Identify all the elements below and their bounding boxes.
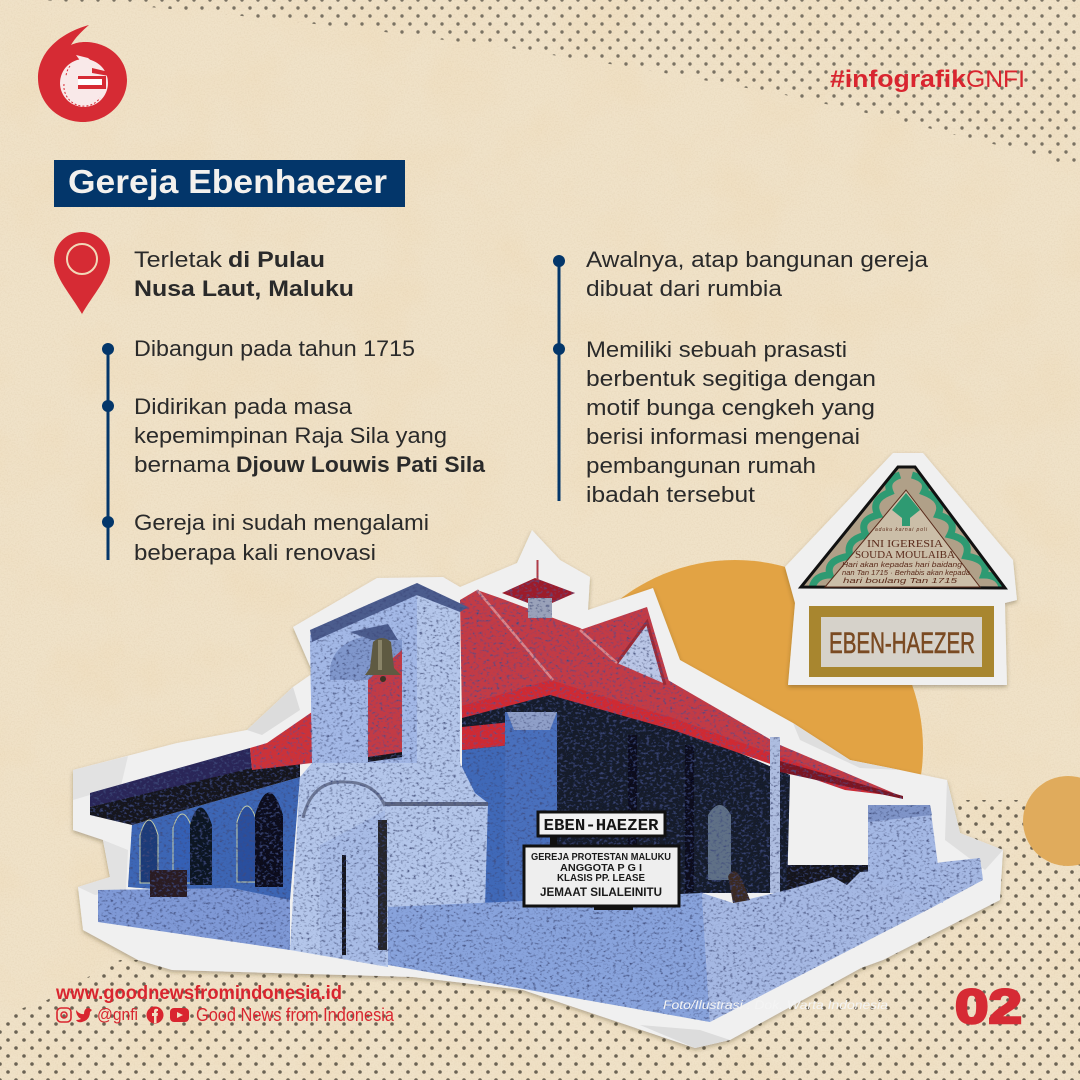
text: left column facts: Gereja ini sudah mengalami xyxy=(134,510,429,535)
text: left column facts: beberapa kali renovasi xyxy=(134,540,376,565)
hashtag: #infografik xyxy=(830,66,967,93)
triangular plaque: aduku karnai poli xyxy=(875,527,928,533)
triangular plaque: INI IGERESIA xyxy=(867,538,943,550)
icon: youtube xyxy=(170,1008,189,1022)
footer: website and socials: www.goodnewsfromindonesia.id xyxy=(55,983,342,1004)
text: left column facts: kepemimpinan Raja Sila yang xyxy=(134,423,447,448)
text: right column facts xyxy=(586,247,929,507)
photo credit: Foto/Ilustrasi : Dok. Warta Indonesia xyxy=(663,998,888,1012)
photo: church cut-out xyxy=(73,530,1003,1048)
page number: 02 xyxy=(955,981,1022,1034)
hashtag: GNFI xyxy=(966,66,1025,93)
triangular plaque xyxy=(801,467,1005,588)
icon: facebook xyxy=(146,1006,164,1024)
triangular plaque: hari boulang Tan 1715 xyxy=(843,578,957,585)
text: right column facts: pembangunan rumah xyxy=(586,453,816,478)
text: right column facts: dibuat dari rumbia xyxy=(586,276,783,301)
text: right column facts: ibadah tersebut xyxy=(586,482,755,507)
text: left column facts: bernama xyxy=(134,452,231,477)
icon: location pin xyxy=(54,232,110,314)
icon: twitter xyxy=(76,1008,92,1022)
footer: website and socials: Good News from Indonesia xyxy=(196,1005,395,1025)
icon: bell xyxy=(365,638,401,682)
sign: church name: EBEN-HAEZER xyxy=(544,817,659,836)
title banner: Gereja Ebenhaezer xyxy=(68,163,387,200)
text: right column facts: motif bunga cengkeh yang xyxy=(586,395,875,420)
text: left column facts: Dibangun pada tahun 1715 xyxy=(134,336,415,361)
rectangular plaque: EBEN-HAEZER xyxy=(829,627,975,660)
sign: church name xyxy=(538,812,665,846)
text: location xyxy=(134,247,354,301)
text: location: Terletak xyxy=(134,247,223,272)
decorative small circle xyxy=(1023,776,1080,866)
text: right column facts: berisi informasi mengenai xyxy=(586,424,860,449)
decorative orange circle xyxy=(547,560,923,936)
footer: website and socials xyxy=(55,983,395,1025)
text: right column facts: berbentuk segitiga dengan xyxy=(586,366,876,391)
triangular plaque: SOUDA MOULAIBA xyxy=(855,550,956,561)
triangular plaque: nan Tan 1715 · Berhabis akan kepada xyxy=(842,570,970,577)
icon: instagram xyxy=(57,1008,71,1022)
sign: congregation: KLASIS PP. LEASE xyxy=(557,873,645,884)
halftone dots: bottom xyxy=(0,800,1080,1080)
triangular plaque: Hari akan kepadas hari baidang xyxy=(842,562,962,569)
text: right column facts: Memiliki sebuah prasasti xyxy=(586,337,847,362)
sign: congregation xyxy=(524,846,679,910)
footer: website and socials: @gnfi xyxy=(97,1005,138,1024)
text: left column facts xyxy=(134,336,486,565)
text: location: Nusa Laut, Maluku xyxy=(134,276,354,301)
text: location: di Pulau xyxy=(228,247,325,272)
sign: congregation: GEREJA PROTESTAN MALUKU xyxy=(531,852,671,863)
text: left column facts: Djouw Louwis Pati Sila xyxy=(236,452,486,477)
title banner xyxy=(54,160,405,207)
sign: congregation: ANGGOTA P G I xyxy=(560,863,642,874)
text: left column facts: Didirikan pada masa xyxy=(134,394,353,419)
timeline: left xyxy=(102,343,114,560)
hashtag xyxy=(830,66,1025,93)
logo: GNFI xyxy=(38,25,127,122)
halftone dots: top right xyxy=(40,0,1080,165)
timeline: right xyxy=(553,255,565,501)
text: right column facts: Awalnya, atap bangunan gereja xyxy=(586,247,929,272)
rectangular plaque xyxy=(809,606,994,677)
church building xyxy=(90,560,983,1022)
torn paper backing xyxy=(73,530,1003,1048)
sign: congregation: JEMAAT SILALEINITU xyxy=(540,885,662,899)
photo: inscription plaques xyxy=(785,453,1017,685)
